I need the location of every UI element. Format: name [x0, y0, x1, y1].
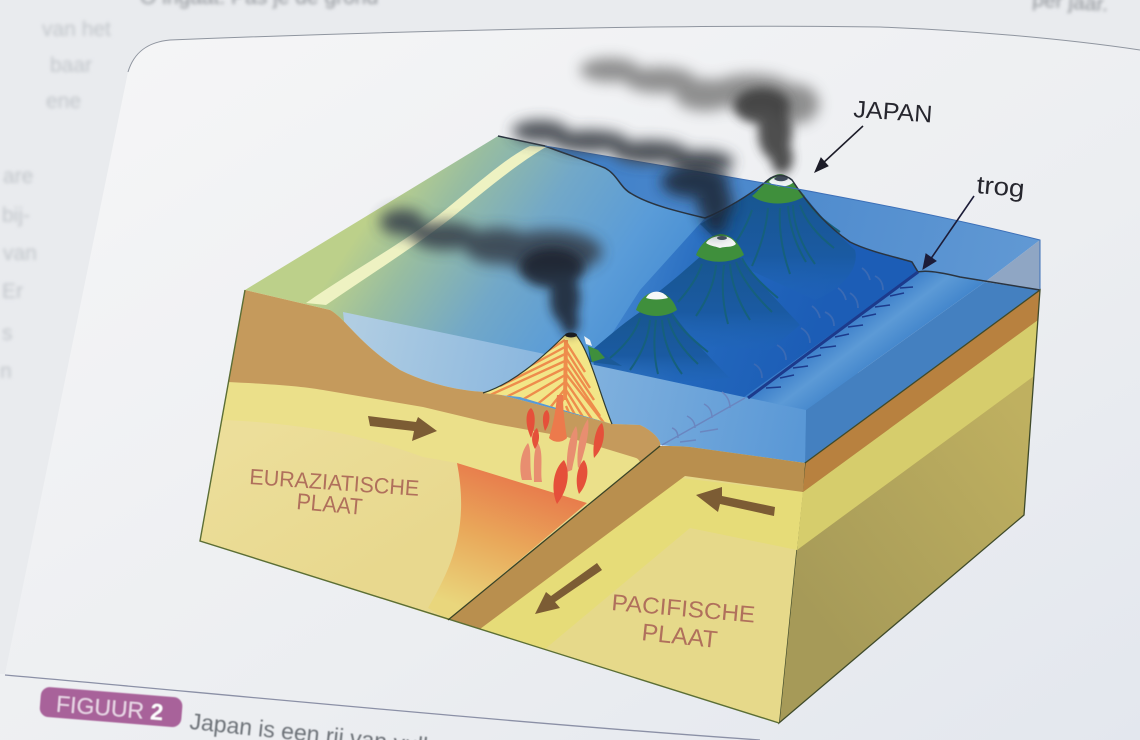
blurred margin text on the left: ene: [46, 90, 81, 113]
right side face: [779, 290, 1040, 723]
smoke plume: rear volcano: [580, 58, 819, 174]
plate motion arrow: Pacific down: [535, 563, 602, 614]
Eurasian plate front face: [200, 290, 779, 723]
water top edge: [545, 146, 1040, 290]
water surface behind ridge: [545, 146, 1040, 282]
mountain: front volcano: [592, 292, 730, 385]
block diagram: [200, 58, 1040, 723]
blurred margin text on the left: n: [0, 360, 12, 383]
road on land: [306, 146, 546, 305]
caption badge: [39, 686, 183, 728]
blurred margin text on the left: van het: [42, 18, 111, 41]
arrow: Japan pointer: [815, 126, 863, 172]
blurred text at top of page: [140, 0, 1109, 16]
blurred margin text on the left: Er: [2, 280, 23, 303]
label: Japan: JAPAN: [853, 96, 933, 128]
arrow: trog pointer: [923, 196, 974, 269]
blurred margin text on the left: van: [3, 242, 37, 265]
blurred margin text on the left: bij-: [2, 204, 30, 227]
front water section: [343, 312, 806, 463]
smoke plume: front volcano: [380, 209, 602, 335]
label: plaat (Pacific): PLAAT: [640, 619, 719, 654]
blurred margin text on the left: are: [3, 165, 33, 188]
subduction line: [448, 446, 660, 620]
magma chamber: [428, 463, 587, 620]
label: Pacifische plaat: PACIFISCHE: [611, 589, 756, 628]
caption divider: [5, 675, 760, 740]
label: trog: trog: [975, 171, 1026, 203]
blurred margin text on the left: baar: [50, 54, 92, 77]
blurred margin text on the left: s: [2, 322, 12, 345]
label: Euraziatische plaat: EURAZIATISCHE: [249, 464, 420, 501]
block outline: [200, 290, 779, 723]
land and sea floor surface: [245, 136, 918, 463]
deep sea floor: [590, 176, 918, 398]
mountain: middle volcano: [637, 234, 800, 350]
label: plaat (Eurasian): PLAAT: [296, 488, 364, 520]
plate motion arrow: Eurasian: [368, 416, 437, 441]
water corner sliver: [985, 240, 1040, 290]
ridge outline: [498, 136, 1040, 290]
water block right face: [805, 282, 1040, 463]
plate motion arrow: Pacific right: [696, 487, 775, 516]
trench line: [662, 268, 918, 445]
magma plumes: [520, 395, 604, 504]
mountain: peak hidden behind cone: [584, 336, 622, 366]
yellow layer: [222, 382, 650, 507]
smoke plume: middle volcano: [512, 120, 734, 234]
blurred margin text on the left: [0, 18, 111, 383]
brown crust layer: [228, 290, 660, 462]
Pacific plate front face: [448, 446, 805, 723]
striped volcano cone: [483, 332, 612, 428]
caption badge: FIGUUR 2: [55, 691, 164, 725]
mountain: Japan peak: [700, 174, 856, 300]
trench strip: [744, 271, 985, 410]
